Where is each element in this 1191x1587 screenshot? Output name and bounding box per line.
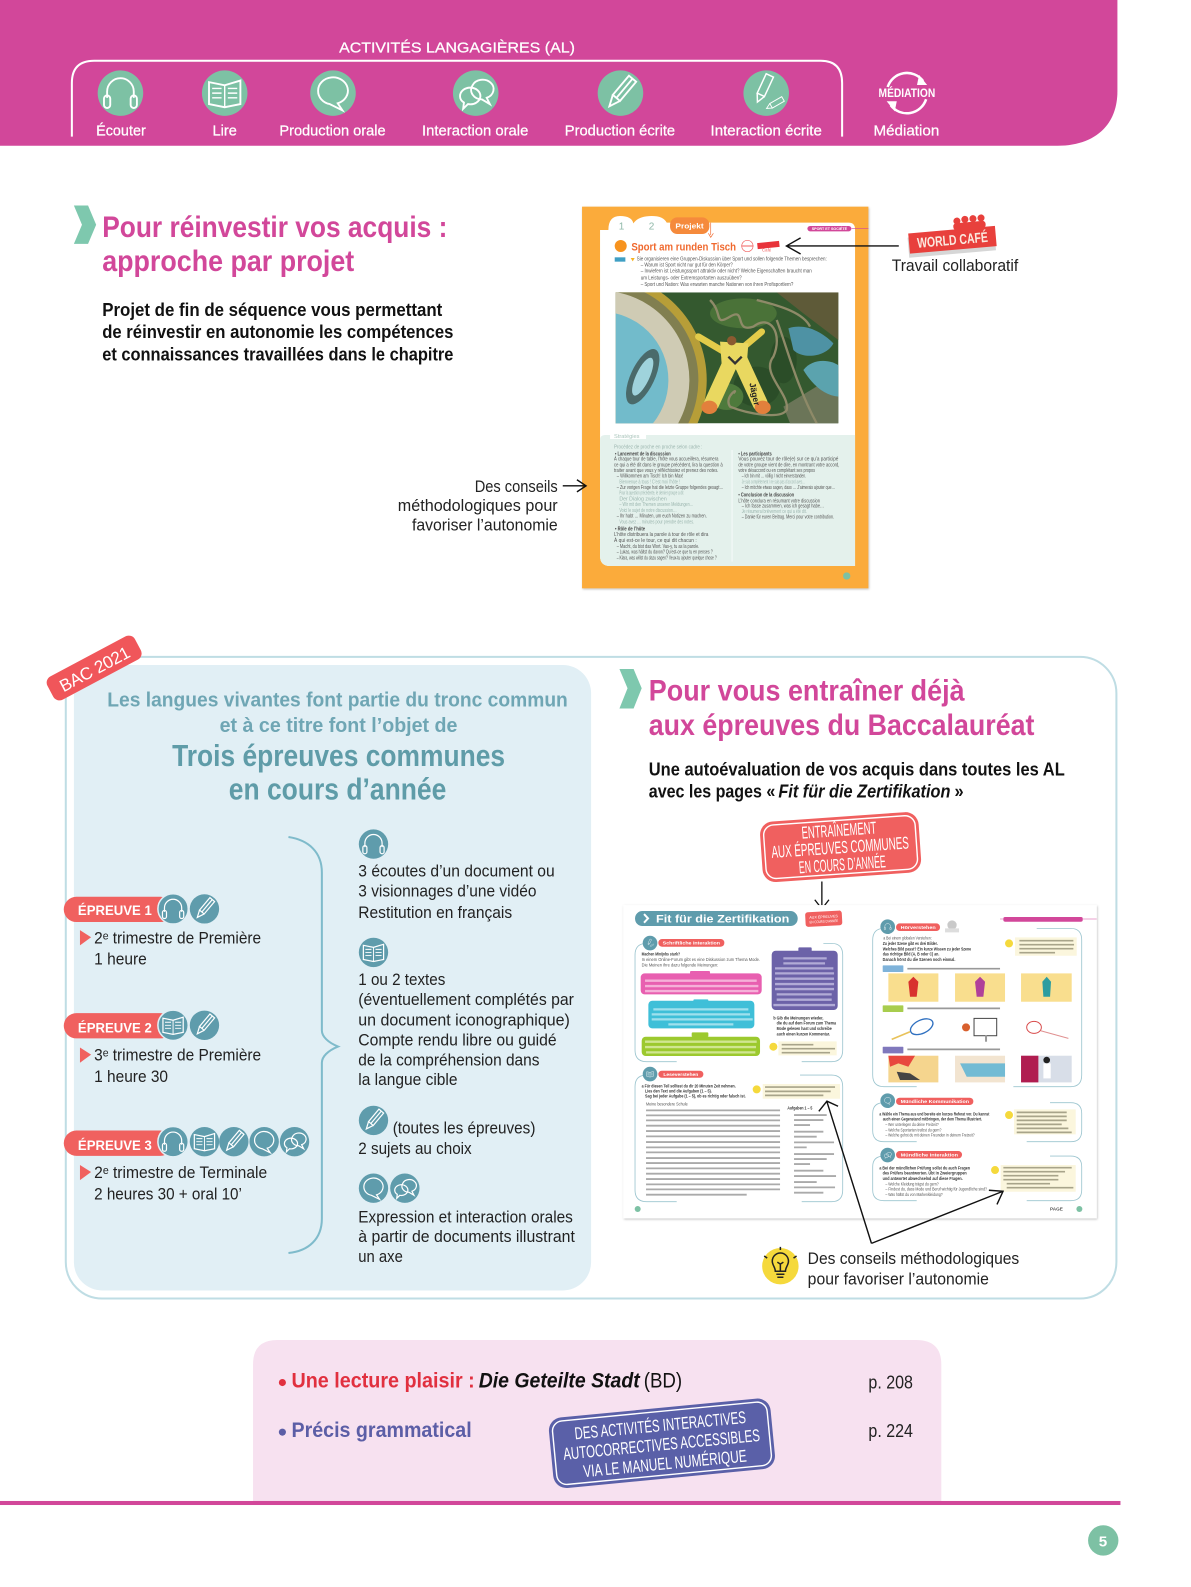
page marker — [843, 572, 850, 580]
panel: mündliche interaktion: des Prüfers beantworten. Übt in Zweiergruppen — [883, 1171, 967, 1176]
text: autoévaluation — [649, 759, 1065, 802]
panel: hörverstehen: Danach hörst du die Szenen noch einmal. — [883, 957, 955, 962]
panel: leseverstehen: Leseverstehen — [663, 1072, 699, 1077]
tag: bac 2021: BAC 2021 — [56, 642, 133, 696]
panel: schriftliche interaktion: In einem Online-Forum gibt es eine Diskussion zum Thema Mode. — [642, 957, 760, 962]
item: une lecture plaisir: (BD) — [644, 1369, 682, 1393]
panel: stratégies: – Wir mit den Themen unseren Meldungen… — [619, 502, 693, 508]
panel: stratégies: Voici le sujet de notre discussion… — [619, 508, 677, 514]
heading: épreuves du baccalauréat: Pour vous entraîner déjà — [649, 674, 965, 707]
label: production orale: Production orale — [279, 124, 386, 140]
panel: mündliche kommunikation: – Wer unterlegen du deine Freizeit? — [885, 1122, 939, 1127]
icon: production orale — [310, 70, 356, 116]
tab: projekt — [670, 217, 713, 237]
text: conseils méthodologiques: méthodologiques pour — [398, 497, 558, 515]
panel: hörverstehen: Zu jeder Szene gibt es drei Bilder. — [883, 941, 938, 946]
heading: tronc commun — [107, 689, 568, 807]
callout: activités interactives — [548, 1397, 776, 1489]
item: une lecture plaisir: Une lecture plaisir : — [291, 1369, 475, 1393]
page footer — [635, 1206, 1082, 1212]
callout: entraînement — [759, 811, 922, 883]
text: conseils — [808, 1250, 1019, 1288]
bracket — [288, 837, 338, 1253]
panel: stratégies: • Les participants — [738, 451, 772, 457]
panel: stratégies: Pour la question précédente, le dernier groupe a dit — [619, 491, 684, 497]
text: projet description: Projet de fin de séquence vous permettant — [102, 300, 442, 320]
panel: stratégies: – Ihr habt … Minuten, um euch Notizen zu machen. — [617, 513, 707, 519]
label: écouter: Écouter — [96, 123, 146, 140]
icon: chevron projet — [74, 205, 96, 244]
détail écoute: Restitution en français — [358, 904, 512, 922]
panel: double page fit für die zertifikation — [623, 905, 1097, 1218]
panel: stratégies: – Willkommen am Tisch! Ich bin Max! — [617, 473, 683, 479]
détail oral: à partir de documents illustrant — [358, 1228, 575, 1246]
panel: stratégies: – Zur vorigen Frage hat die letzte Gruppe folgendes gesagt… — [617, 485, 723, 491]
panel: stratégies: Der Dialog zwischen — [619, 497, 667, 503]
détail écoute — [358, 829, 555, 922]
panel: stratégies: Vous avez … minutes pour prendre des notes. — [619, 519, 694, 525]
tag body — [908, 226, 997, 254]
panel: stratégies: Je suis complètement / ne suis pas d’accord avec… — [742, 479, 805, 485]
panel: mündliche kommunikation: – Welche gehst du mit deinen Freunden in deinem Freizeit? — [885, 1133, 975, 1138]
instructions — [615, 257, 827, 288]
page number — [1088, 1525, 1118, 1556]
panel: stratégies: À chaque tour de table, l’hôte vous accueillera, résumera — [614, 456, 719, 463]
panel: leseverstehen: a Für diesen Teil solltest du dir 20 Minuten Zeit nehmen. — [642, 1083, 736, 1088]
épreuve 3 — [64, 1126, 309, 1203]
panel: stratégies: Je résumerai brièvement ce qui a été dit. — [742, 509, 807, 515]
icon: people — [952, 214, 986, 231]
tab numbers: 1 — [619, 221, 625, 232]
épreuve 1: ÉPREUVE 1 — [78, 902, 152, 919]
label: production écrite: Production écrite — [565, 124, 675, 140]
panel: stratégies: L’hôte conclura en résumant votre discussion — [738, 498, 820, 504]
épreuve 2: 3ᵉ trimestre de Première — [94, 1047, 261, 1065]
tag: entraînement — [805, 910, 842, 927]
heading: activités langagières: ACTIVITÉS LANGAGIÈRES (AL) — [339, 40, 575, 57]
panel: schriftliche interaktion: Mode gelesen hast und schreibe — [777, 1026, 832, 1031]
icon: production écrite — [598, 70, 643, 116]
label: interaction orale: Interaction orale — [422, 124, 528, 140]
panel: hörverstehen: a Bei einem globalen Verstehen: — [883, 936, 932, 941]
panel: stratégies: Vous pouvez tour de rôle(e) sur ce qu’a participé — [738, 457, 839, 463]
heading: sport am runden tisch: Café — [762, 248, 772, 253]
tag: entraînement: AUX ÉPREUVES — [809, 913, 839, 920]
panel: stratégies: L’hôte distribuera la parole à tour de rôle et dira — [614, 532, 709, 538]
épreuve 2: ÉPREUVE 2 — [78, 1019, 152, 1036]
text: conseils méthodologiques: Des conseils — [475, 478, 558, 496]
text: conseils méthodologiques — [398, 478, 558, 534]
panel: mündliche kommunikation: auch einen Gegenstand mitbringen, der dem Thema illustriert. — [883, 1117, 982, 1122]
détail écriture: (toutes les épreuves) — [393, 1120, 535, 1138]
détail oral — [358, 1174, 575, 1266]
callout: activités interactives: AUTOCORRECTIVES ACCESSIBLES — [562, 1425, 761, 1464]
panel: renvois — [253, 1340, 941, 1502]
item: précis grammatical — [279, 1418, 913, 1442]
panel: stratégies: – Ich fasse zusammen, was ich gesagt habe… — [742, 503, 824, 509]
heading: tronc commun: en cours d’année — [229, 774, 446, 807]
tag: section — [807, 226, 868, 231]
photo: saut à l'élastique — [616, 292, 838, 424]
text: autoévaluation: » — [954, 782, 964, 802]
détail écoute: 3 écoutes d’un document ou — [358, 862, 555, 880]
détail écriture: 2 sujets au choix — [358, 1140, 472, 1158]
heading: épreuves du baccalauréat: aux épreuves du Baccalauréat — [649, 709, 1035, 742]
détail oral: Expression et interaction orales — [358, 1209, 573, 1227]
panel: stratégies: • Rôle de l’hôte — [615, 527, 645, 533]
item: précis grammatical: p. 224 — [868, 1421, 913, 1441]
panel: stratégies: Stratégies — [614, 434, 640, 440]
text: autoévaluation: avec les pages « — [649, 782, 775, 802]
panel: leseverstehen: Aufgaben 1 – 5 — [787, 1105, 813, 1110]
épreuve 2 — [64, 1010, 261, 1086]
panel: schriftliche interaktion: die du auf dem Forum zum Thema — [777, 1021, 837, 1026]
panel: stratégies: – Klara, was willst du dazu sagen? Veux-tu ajouter quelque chose ? — [617, 555, 717, 561]
panel: mündliche interaktion: – Welche Kleidung trägst du gern? — [885, 1181, 939, 1186]
panel: stratégies: ce qui a été dit dans le groupe précédent, lira la question à — [614, 462, 723, 468]
icon: interaction orale — [453, 70, 498, 116]
header: fit für die zertifikation: Fit für die Zertifikation — [656, 914, 790, 926]
callout: entraînement: ENTRAÎNEMENT — [801, 817, 877, 843]
text: conseils méthodologiques: favoriser l’autonomie — [412, 516, 558, 534]
panel: stratégies: Bienvenue à tous ! C’est moi l’hôte ! — [619, 479, 680, 485]
panel: outline baccalauréat — [66, 657, 1116, 1299]
callout: activités interactives: DES ACTIVITÉS INTERACTIVES — [574, 1407, 747, 1443]
panel: hörverstehen: Hörverstehen — [901, 925, 936, 930]
épreuve 3: 2 heures 30 + oral 10’ — [94, 1185, 242, 1203]
panel: stratégies: – Ich bin mit … völlig / nicht einverstanden. — [742, 473, 806, 479]
heading: approche par projet: Pour réinvestir vos acquis : — [102, 211, 447, 244]
détail lecture: Compte rendu libre ou guidé — [358, 1032, 557, 1050]
icon: médiation: MÉDIATION — [879, 85, 935, 100]
panel: mündliche kommunikation: a Wähle ein Thema aus und bereite ein kurzes Referat vor. Du kannst — [879, 1111, 990, 1116]
label: lire: Lire — [213, 124, 237, 140]
panel: leseverstehen: Lies den Text und die Aufgaben (1 – 5). — [645, 1088, 712, 1093]
footer rule — [0, 1501, 1120, 1505]
tag: bac 2021 — [44, 633, 144, 703]
arrow: conseils — [563, 480, 586, 492]
instructions: – Sport und Nation: Was erwarten manche Nationen von ihren Profisportlern? — [641, 282, 794, 288]
épreuve 3: ÉPREUVE 3 — [78, 1137, 152, 1154]
text: projet description: de réinvestir en autonomie les compétences — [102, 322, 453, 342]
arrows: conseils méthodologiques — [819, 1101, 1003, 1243]
épreuve 1 — [64, 894, 261, 969]
panel: mündliche kommunikation: – Welche Sportarten treibst du gern? — [885, 1127, 942, 1132]
text: conseils: Des conseils méthodologiques — [808, 1250, 1019, 1268]
figure — [698, 332, 762, 353]
icon: interaction écrite — [743, 70, 789, 116]
détail écoute: 3 visionnages d’une vidéo — [358, 883, 536, 901]
heading: épreuves du baccalauréat — [649, 674, 1035, 742]
détail lecture: un document iconographique) — [358, 1011, 570, 1029]
arrow: world café — [786, 238, 899, 254]
heading: tronc commun: Trois épreuves communes — [172, 740, 505, 773]
panel: leseverstehen: Meine besondere Schule — [646, 1102, 688, 1107]
panel: schriftliche interaktion: Schriftliche Interaktion — [663, 941, 720, 946]
item: une lecture plaisir: p. 208 — [868, 1373, 913, 1393]
panel: stratégies: – Ich möchte etwas sagen, dass … J’aimerais ajouter que… — [742, 485, 835, 491]
instructions: Sie organisieren eine Gruppen-Diskussion über Sport und sollen folgende Themen besprechen: — [637, 257, 827, 263]
panel: schriftliche interaktion: auch einen kurzen Kommentar. — [777, 1031, 830, 1036]
instructions: – Inwiefern ist Leistungssport attraktiv oder nicht? Welche Eigenschaften braucht man — [641, 269, 812, 275]
bracket: activités — [72, 61, 842, 137]
tag: world café: WORLD CAFÉ — [916, 229, 989, 252]
panel: mündliche kommunikation — [873, 1093, 1082, 1142]
détail lecture: (éventuellement complétés par — [358, 991, 574, 1009]
panel: mündliche kommunikation: Mündliche Kommunikation — [901, 1099, 969, 1104]
panel: stratégies: votre désaccord ou en complétant ses propos — [738, 468, 815, 474]
tab numbers: 2 — [649, 221, 655, 232]
panel: mündliche interaktion: und antwortet abwechselnd auf diese Fragen. — [883, 1176, 963, 1181]
panel: schriftliche interaktion: Die Meinen ihre dazu folgende Meinungen: — [642, 962, 718, 967]
panel: hörverstehen — [873, 917, 1097, 1087]
panel: mündliche interaktion: – Was hältst du von Markenkleidung? — [885, 1192, 943, 1197]
détail oral: un axe — [358, 1248, 403, 1266]
icon: chevron baccalauréat — [619, 669, 642, 708]
panel: mündliche interaktion: – Findest du, dass Mode und Beruf wichtig für Jugendliche sind? — [885, 1187, 988, 1192]
text: autoévaluation: Une autoévaluation de vos acquis dans toutes les AL — [649, 759, 1065, 779]
panel: stratégies: de votre groupe vient de dire, en montrant votre accord, — [738, 462, 839, 468]
text: autoévaluation: Fit für die Zertifikation — [778, 782, 950, 802]
icon: médiation — [879, 73, 935, 113]
callout: entraînement: AUX ÉPREUVES COMMUNES — [771, 832, 909, 862]
panel: stratégies: – Macht, du bist das Wort. Vas-y, tu as la parole. — [617, 544, 699, 550]
header: fit für die zertifikation — [635, 911, 798, 926]
panel: stratégies — [600, 432, 855, 566]
instructions: – Warum ist Sport nicht nur gut für den Körper? — [641, 262, 733, 268]
page number: 5 — [1099, 1534, 1108, 1551]
page footer: PAGE — [1050, 1207, 1063, 1212]
panel: schriftliche interaktion: Machen Minijobs stark? — [642, 952, 680, 957]
épreuve 3: 2ᵉ trimestre de Terminale — [94, 1164, 267, 1182]
item: précis grammatical: Précis grammatical — [291, 1418, 472, 1442]
détail écriture — [358, 1106, 535, 1158]
item: une lecture plaisir — [279, 1369, 913, 1393]
heading: sport am runden tisch — [615, 240, 780, 254]
panel: mündliche interaktion: Mündliche Interaktion — [901, 1153, 958, 1158]
heading: tronc commun: Les langues vivantes font partie du tronc commun — [107, 689, 568, 711]
détail lecture — [358, 938, 574, 1089]
text: projet description: et connaissances travaillées dans le chapitre — [102, 344, 453, 364]
heading: approche par projet — [102, 211, 447, 278]
header band — [0, 0, 1117, 146]
épreuve 1: 1 heure — [94, 951, 147, 969]
label: interaction écrite: Interaction écrite — [711, 124, 822, 140]
panel: hörverstehen: das richtige Bild (A, B oder C) an. — [883, 952, 939, 957]
heading: tronc commun: et à ce titre font l’objet de — [220, 715, 457, 737]
tag: section: SPORT ET SOCIÉTÉ — [812, 226, 848, 231]
icon: ampoule — [762, 1247, 799, 1284]
panel: hörverstehen: Welches Bild passt? Ein kurze Wissen zu jeder Szene — [883, 946, 972, 951]
text: conseils: pour favoriser l’autonomie — [808, 1270, 989, 1288]
tab: projekt: Projekt — [675, 223, 705, 230]
heading: approche par projet: approche par projet — [102, 245, 354, 278]
text: projet description — [102, 300, 453, 364]
détail lecture: 1 ou 2 textes — [358, 971, 445, 989]
arrow: vers fit für die zertifikation — [815, 882, 829, 909]
tag: world café — [906, 213, 997, 258]
label: médiation: Médiation — [873, 124, 939, 140]
icon: écouter — [98, 70, 143, 116]
heading: sport am runden tisch: Sport am runden Tisch — [631, 242, 736, 254]
instructions: um Leistungs- oder Extremsportarten auszuüben? — [641, 275, 742, 281]
text: travail collaboratif: Travail collaboratif — [892, 257, 1019, 275]
panel: stratégies: traiter avant que vous y réfléchissiez et prenez des notes. — [614, 468, 718, 474]
détail lecture: de la compréhension dans — [358, 1052, 539, 1070]
panel: leseverstehen — [635, 1067, 843, 1202]
panel: schriftliche interaktion: b Gib die Meinungen wieder, — [773, 1015, 823, 1020]
panel: stratégies: – Danke für euren Beitrag. Merci pour votre contribution. — [742, 515, 834, 521]
panel: stratégies: Procédez de proche en proche selon cadre : — [614, 444, 702, 450]
panel: trois épreuves — [64, 665, 591, 1290]
panel: stratégies: À qui est-ce le tour, ce qui dit chacun : — [614, 537, 697, 544]
panel: stratégies: • Lancement de la discussion — [615, 451, 671, 457]
panel: mündliche interaktion — [873, 1148, 1082, 1201]
détail lecture: la langue cible — [358, 1071, 457, 1089]
panel: mündliche interaktion: a Bei der mündlichen Prüfung sollst du auch Fragen — [879, 1165, 970, 1170]
icon: lire — [202, 70, 247, 116]
photo: saut à l'élastique: Jäger — [747, 382, 762, 407]
tag: entraînement: EN COURS D’ANNÉE — [809, 918, 839, 924]
item: une lecture plaisir: Die Geteilte Stadt — [479, 1369, 641, 1393]
épreuve 1: 2ᵉ trimestre de Première — [94, 929, 261, 947]
panel: stratégies: • Conclusion de la discussion — [738, 493, 794, 499]
panel: leseverstehen: Sag bei jeder Aufgabe (1 – 5), ob es richtig oder falsch ist. — [645, 1093, 746, 1098]
panel: page projekt miniature — [582, 206, 870, 590]
callout: entraînement: EN COURS D’ANNÉE — [798, 851, 886, 877]
panel: stratégies: – Lukas, was hältst du davon? Qu’est-ce que tu en penses ? — [617, 549, 713, 555]
callout: activités interactives: VIA LE MANUEL NUMÉRIQUE — [582, 1446, 747, 1481]
épreuve 2: 1 heure 30 — [94, 1068, 168, 1086]
panel: schriftliche interaktion — [635, 936, 843, 1062]
tab numbers — [619, 221, 655, 232]
